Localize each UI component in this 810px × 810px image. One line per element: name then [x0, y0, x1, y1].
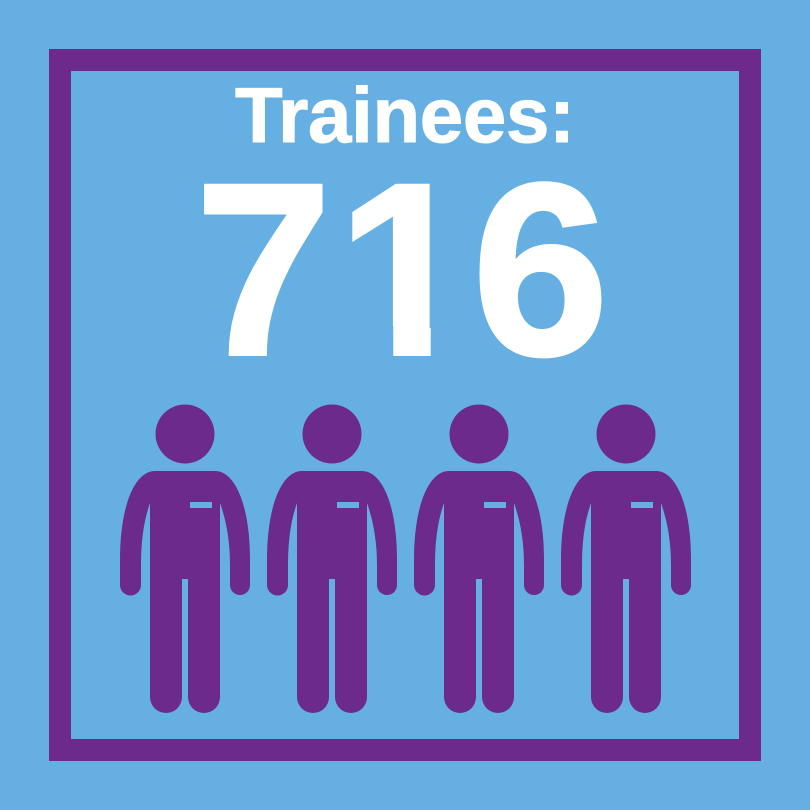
icon row: four trainees: [120, 404, 691, 713]
icon: trainee 3: [414, 404, 544, 713]
icon: trainee 4: [561, 404, 691, 713]
icon: trainee 1: [120, 404, 250, 713]
number: 716: 716: [195, 132, 609, 408]
infographic: trainees count: [49, 49, 761, 761]
heading: Trainees: Trainees:: [235, 71, 575, 159]
icon: trainee 2: [267, 404, 397, 713]
purple frame: [60, 60, 750, 750]
